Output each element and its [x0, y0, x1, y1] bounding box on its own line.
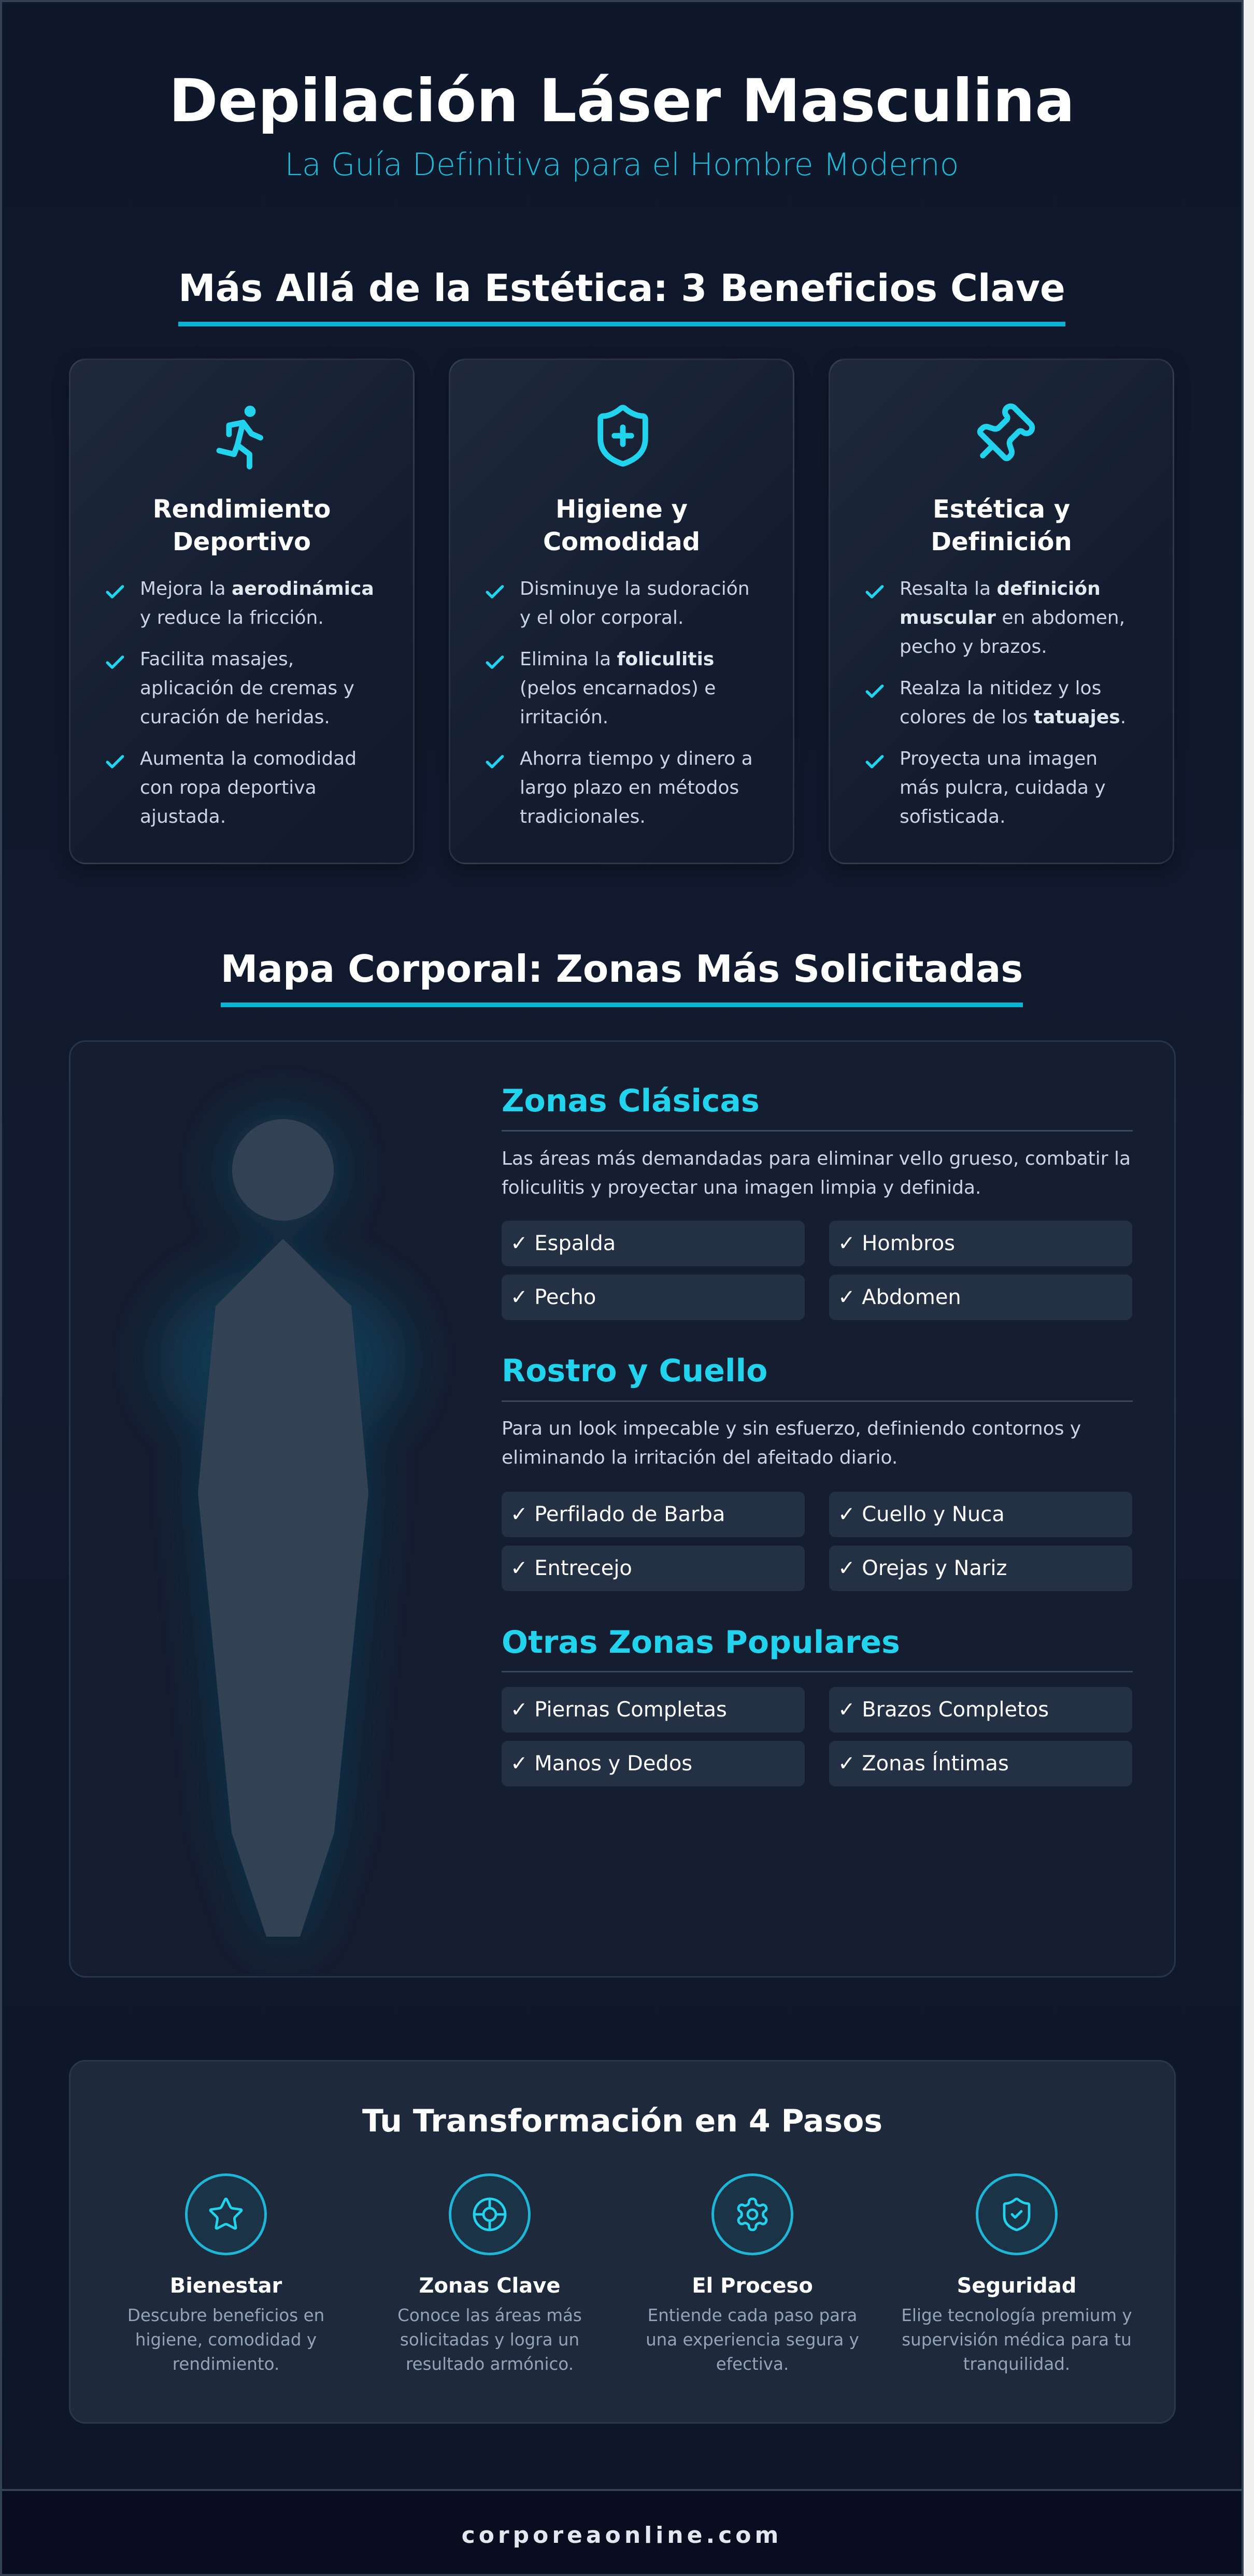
step: el proceso: El Proceso	[692, 2274, 813, 2298]
tags: clasicas: ✓ Pecho	[510, 1285, 596, 1309]
icon: shield check	[976, 2173, 1058, 2255]
heading: mapa corporal: Mapa Corporal: Zonas Más Solicitadas	[221, 947, 1023, 991]
zone: otras heading: Otras Zonas Populares	[502, 1624, 900, 1661]
tags: rostro	[502, 1492, 1132, 1591]
card title	[543, 495, 700, 556]
step: bienestar	[127, 2173, 324, 2374]
step: el proceso	[646, 2173, 859, 2374]
heading: beneficios: Más Allá de la Estética: 3 Beneficios Clave	[178, 266, 1065, 310]
step: seguridad: Seguridad	[957, 2274, 1076, 2298]
list	[486, 578, 753, 827]
tags: rostro: ✓ Entrecejo	[510, 1556, 632, 1580]
list: Elimina la foliculitis (pelos encarnados) e irritación.	[520, 649, 716, 728]
list: Disminuye la sudoración y el olor corporal.	[520, 578, 750, 628]
zone: rostro text: Para un look impecable y sin esfuerzo, definiendo contornos y eliminando la irritación del afeitado diario.	[502, 1418, 1081, 1468]
panel: card rendimiento deportivo	[69, 359, 415, 864]
zone: clasicas heading: Zonas Clásicas	[502, 1083, 760, 1119]
card title	[153, 495, 331, 556]
text: Descubre beneficios en higiene, comodidad y rendimiento.	[127, 2306, 324, 2374]
tags: otras: ✓ Piernas Completas	[510, 1698, 727, 1722]
icon: star	[185, 2173, 267, 2255]
icon: pin	[977, 403, 1035, 461]
tags: otras: ✓ Manos y Dedos	[510, 1752, 692, 1776]
panel: 4 pasos	[69, 2060, 1176, 2424]
tags: rostro: ✓ Perfilado de Barba	[510, 1502, 725, 1526]
tags: rostro: ✓ Orejas y Nariz	[838, 1556, 1007, 1580]
icon: gear	[711, 2173, 793, 2255]
list: Ahorra tiempo y dinero a largo plazo en métodos tradicionales.	[520, 748, 753, 827]
card title: Estética y	[933, 495, 1070, 524]
tags: otras	[502, 1687, 1132, 1786]
tags: clasicas: ✓ Abdomen	[838, 1285, 961, 1309]
list	[865, 578, 1126, 827]
tags: otras: ✓ Brazos Completos	[838, 1698, 1049, 1722]
list: Resalta la definición muscular en abdomen, pecho y brazos.	[900, 578, 1125, 657]
zone: clasicas text: Las áreas más demandadas para eliminar vello grueso, combatir la foliculitis y proyectar una imagen limpia y definida.	[502, 1148, 1131, 1198]
footer text: corporeaonline.com	[462, 2522, 782, 2549]
text: Conoce las áreas más solicitadas y logra un resultado armónico.	[397, 2306, 582, 2374]
tags: clasicas	[502, 1221, 1132, 1320]
step: zonas clave: Zonas Clave	[419, 2274, 560, 2298]
body figure	[149, 1105, 417, 1940]
tags: clasicas: ✓ Espalda	[510, 1232, 616, 1255]
text: Elige tecnología premium y supervisión médica para tu tranquilidad.	[901, 2306, 1132, 2374]
panel: card estetica y definicion	[829, 359, 1174, 864]
list: Mejora la aerodinámica y reduce la fricción.	[140, 578, 374, 628]
card title: Definición	[931, 527, 1072, 556]
icon: lifebuoy	[449, 2173, 531, 2255]
tags: rostro: ✓ Cuello y Nuca	[838, 1502, 1005, 1526]
step: zonas clave	[397, 2173, 582, 2374]
subtitle: La Guía Definitiva para el Hombre Moderno	[285, 147, 959, 183]
footer	[2, 2489, 1242, 2576]
title: Depilación Láser Masculina	[169, 66, 1075, 135]
card title	[931, 495, 1072, 556]
tags: otras: ✓ Zonas Íntimas	[838, 1752, 1009, 1776]
step: seguridad	[901, 2173, 1132, 2374]
tags: clasicas: ✓ Hombros	[838, 1232, 955, 1255]
text: Entiende cada paso para una experiencia segura y efectiva.	[646, 2306, 859, 2374]
card title: Higiene y	[555, 495, 688, 524]
list: Facilita masajes, aplicación de cremas y curación de heridas.	[140, 649, 354, 728]
card title: Comodidad	[543, 527, 700, 556]
zone: rostro heading: Rostro y Cuello	[502, 1353, 767, 1389]
list	[106, 578, 374, 827]
steps title: Tu Transformación en 4 Pasos	[362, 2103, 882, 2139]
card title: Rendimiento	[153, 495, 331, 524]
list: Aumenta la comodidad con ropa deportiva ajustada.	[140, 748, 357, 827]
panel: mapa corporal	[69, 1040, 1176, 1978]
panel: card higiene y comodidad	[449, 359, 794, 864]
icon: runner	[217, 406, 263, 469]
list: Proyecta una imagen más pulcra, cuidada y sofisticada.	[900, 748, 1106, 827]
icon: shield plus	[597, 405, 648, 467]
step: bienestar: Bienestar	[170, 2274, 282, 2298]
list: Realza la nitidez y los colores de los tatuajes.	[900, 678, 1126, 728]
card title: Deportivo	[173, 527, 311, 556]
